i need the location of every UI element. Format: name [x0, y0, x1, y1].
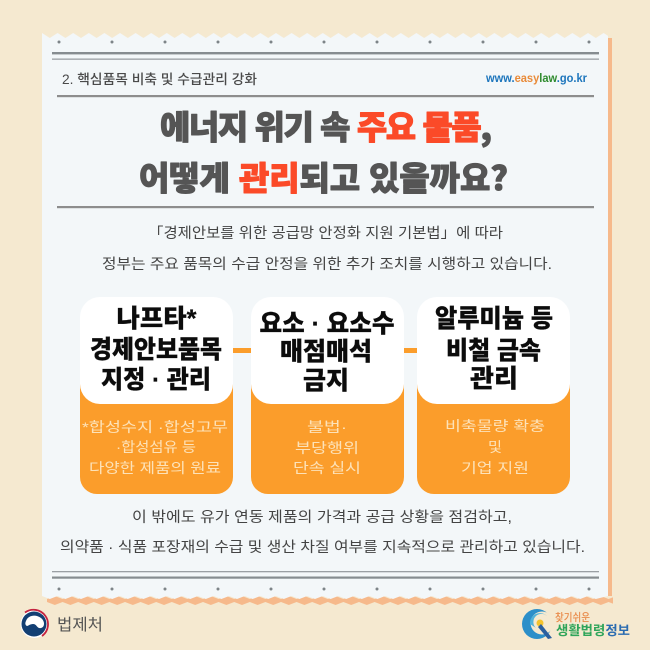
title	[139, 101, 508, 200]
panel: urea: 매점매석	[280, 338, 372, 366]
intro text: 정부는 주요 품목의 수급 안정을 위한 추가 조치를 시행하고 있습니다.	[102, 256, 552, 273]
easylaw logo text: 생활법령정보	[556, 623, 630, 638]
panel: urea: 단속 실시	[293, 460, 361, 476]
panel: aluminum	[417, 297, 570, 494]
panel: naphtha: *합성수지 ·합성고무	[82, 419, 228, 435]
icon: easylaw logo	[522, 609, 554, 639]
panel: urea	[251, 297, 404, 494]
panel: aluminum: 알루미늄 등	[435, 305, 553, 333]
top binding dots	[58, 40, 590, 44]
panel: aluminum: 관리	[470, 365, 518, 393]
closing text: 이 밖에도 유가 연동 제품의 가격과 공급 상황을 점검하고,	[132, 509, 512, 526]
bottom binding dots	[58, 588, 590, 590]
closing text: 의약품 · 식품 포장재의 수급 및 생산 차질 여부를 지속적으로 관리하고 있습니다.	[60, 539, 585, 556]
panel: urea: 부당행위	[295, 440, 359, 456]
panel: urea: 불법·	[307, 419, 347, 435]
panel: paper note	[42, 33, 613, 605]
closing text	[60, 509, 585, 556]
connector	[233, 348, 251, 353]
panel: naphtha: ·합성섬유 등	[116, 439, 196, 455]
panel: naphtha	[80, 297, 233, 494]
section heading: 2. 핵심품목 비축 및 수급관리 강화	[62, 72, 258, 87]
panel: naphtha: 나프타*	[116, 305, 197, 333]
connector	[404, 348, 417, 353]
intro text: 「경제안보를 위한 공급망 안정화 지원 기본법」에 따라	[148, 225, 503, 242]
easylaw logo text: 찾기쉬운	[555, 611, 590, 624]
panel: naphtha: 지정 · 관리	[101, 366, 211, 394]
intro text	[102, 225, 552, 273]
title: 에너지 위기 속 주요 물품,	[160, 101, 492, 149]
panel: urea: 금지	[303, 367, 349, 395]
easylaw logo text	[555, 611, 630, 638]
panel: aluminum: 비철 금속	[446, 337, 541, 365]
website url: www.easylaw.go.kr	[485, 73, 588, 85]
title: 어떻게 관리되고 있을까요?	[139, 152, 508, 200]
panel: naphtha: 경제안보품목	[90, 336, 222, 364]
panel: naphtha: 다양한 제품의 원료	[89, 460, 221, 476]
panel: urea: 요소 · 요소수	[260, 310, 394, 338]
panel: aluminum: 및	[488, 439, 502, 455]
ministry name: 법제처	[57, 616, 103, 634]
panel: aluminum: 비축물량 확충	[445, 418, 545, 434]
icon: government emblem	[20, 610, 48, 638]
panel: aluminum: 기업 지원	[461, 460, 529, 476]
